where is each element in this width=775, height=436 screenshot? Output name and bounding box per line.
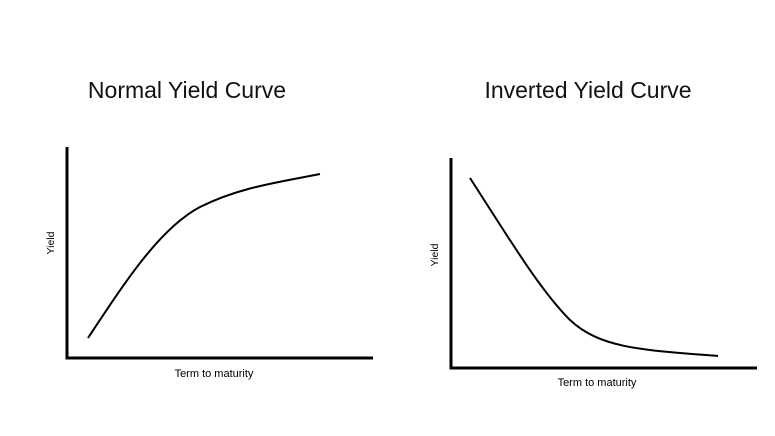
- axes: inverted: [451, 158, 757, 368]
- x label: term to maturity: Term to maturity: [558, 377, 637, 389]
- curve: normal: [88, 174, 320, 338]
- panel: inverted yield curve: [429, 77, 757, 389]
- title: normal yield curve: Normal Yield Curve: [88, 77, 286, 103]
- x label: term to maturity: Term to maturity: [175, 368, 254, 380]
- y label: yield: Yield: [45, 231, 57, 254]
- axes: normal: [67, 147, 373, 358]
- y label: yield: Yield: [429, 243, 441, 266]
- title: inverted yield curve: Inverted Yield Curve: [484, 77, 692, 103]
- panel: normal yield curve: [45, 77, 373, 380]
- curve: inverted: [470, 178, 718, 356]
